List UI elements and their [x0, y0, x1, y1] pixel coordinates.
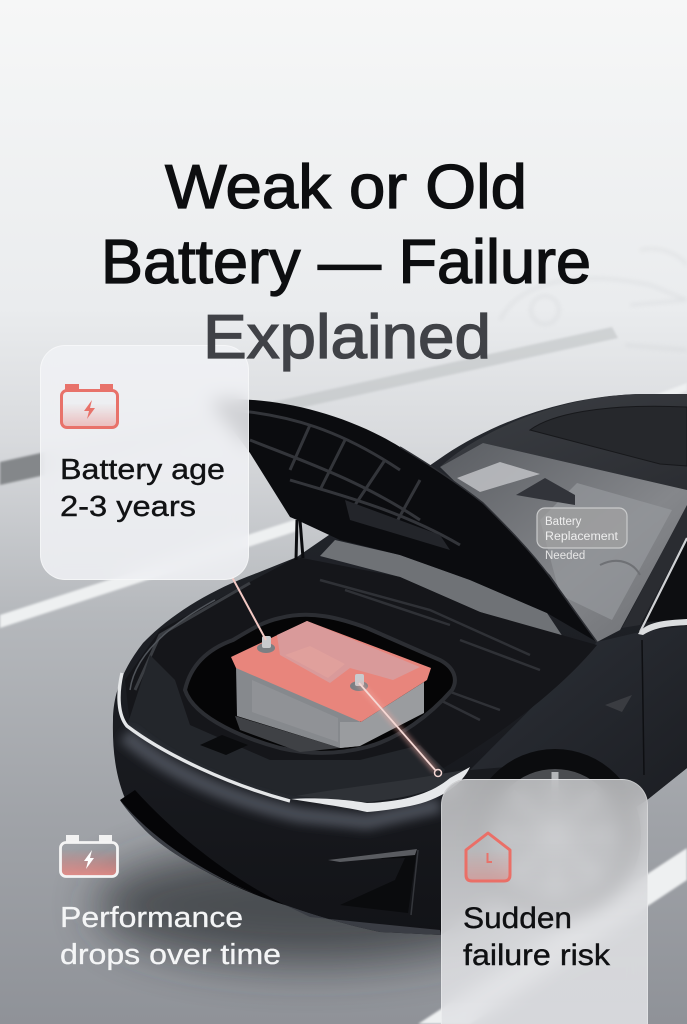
windshield: [440, 443, 687, 642]
distant parked car: [500, 249, 687, 350]
bumper sheen: [125, 735, 440, 822]
curb: [0, 327, 618, 485]
icon: house clock: [466, 833, 510, 881]
icon: battery white: [60, 836, 118, 876]
roof: [440, 394, 687, 490]
text: sudden failure risk: failure risk: [463, 939, 611, 972]
windshield label: Replacement: [545, 531, 619, 543]
text: performance: drops over time: [60, 939, 281, 971]
a pillar: [622, 505, 687, 628]
windshield label: Needed: [545, 550, 585, 562]
terminal left: [257, 636, 275, 653]
text: battery age: [60, 454, 225, 523]
steering wheel hint: [600, 561, 640, 575]
gray inner panel: [320, 540, 565, 640]
title: Weak or Old: [165, 153, 527, 222]
fog light: [328, 849, 418, 915]
base floor: [235, 716, 340, 752]
callout line: to battery terminal: [232, 577, 266, 640]
parking lines: [0, 383, 687, 1024]
text: sudden failure risk: Sudden: [463, 902, 572, 935]
headlight chrome: [291, 767, 470, 812]
lower grille shadow: [120, 790, 285, 905]
title: Battery — Failure: [101, 228, 591, 297]
headlight: [296, 770, 465, 802]
callout line: to headlight: [359, 683, 442, 776]
mirror chrome: [638, 619, 687, 635]
chrome front strip: [119, 673, 290, 801]
title: Explained: [203, 303, 491, 372]
battery: [231, 621, 431, 752]
text: battery age: Battery age: [60, 454, 225, 486]
windshield label: Battery: [545, 516, 582, 528]
car body: [113, 394, 687, 935]
panel: sudden failure: [441, 779, 648, 1024]
door window: [643, 540, 687, 622]
sunroof: [530, 406, 687, 466]
trunk cavity: [185, 615, 455, 753]
hood open: [210, 399, 597, 642]
engine bay: [125, 557, 597, 800]
text: battery age: 2-3 years: [60, 491, 196, 523]
text: sudden failure risk: [463, 902, 611, 972]
terminal right: [350, 674, 368, 691]
title: [101, 153, 591, 372]
car shadow: [95, 845, 525, 965]
text: performance: [60, 902, 281, 971]
wheel: [469, 749, 641, 921]
text: performance: Performance: [60, 902, 243, 934]
panel: battery age: [40, 345, 249, 580]
icon: battery red: [62, 385, 118, 428]
rearview mirror: [516, 478, 575, 505]
hood shelf highlight: [127, 655, 445, 803]
side panel: [470, 626, 687, 800]
